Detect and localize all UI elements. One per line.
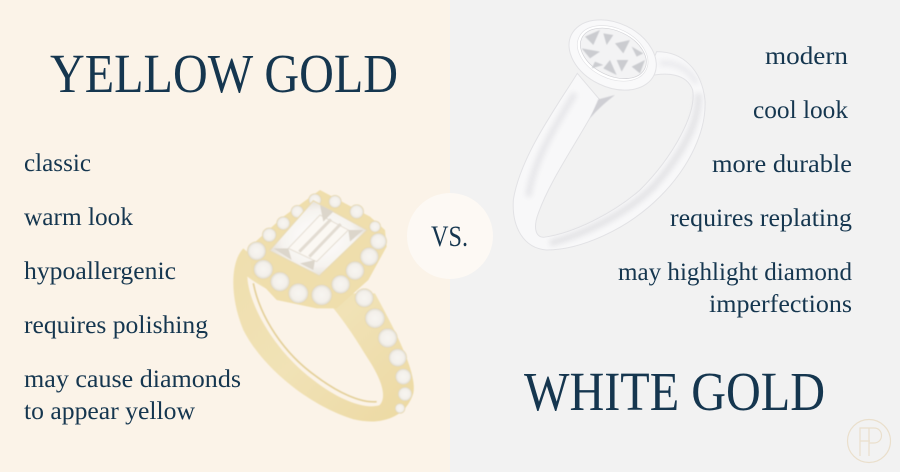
trait: requires replating: requires replating bbox=[670, 205, 853, 232]
trait: classic: classic bbox=[24, 150, 91, 177]
badge: vs. circle bbox=[407, 193, 493, 279]
trait: cool look: cool look bbox=[753, 97, 848, 124]
heading: yellow gold: YELLOW GOLD bbox=[50, 43, 398, 104]
trait: may highlight diamond imperfections bbox=[618, 259, 852, 318]
trait: may highlight diamond imperfections: may highlight diamond bbox=[618, 259, 852, 286]
panel: yellow gold background bbox=[0, 0, 450, 472]
list: white gold traits bbox=[618, 43, 853, 318]
trait: may cause diamonds to appear yellow bbox=[24, 366, 241, 425]
trait: may highlight diamond imperfections: imperfections bbox=[709, 291, 852, 318]
heading: white gold: WHITE GOLD bbox=[524, 361, 825, 422]
icon: white gold bezel ring bbox=[513, 6, 705, 250]
trait: requires polishing: requires polishing bbox=[24, 312, 209, 339]
trait: warm look: warm look bbox=[24, 204, 133, 231]
trait: hypoallergenic: hypoallergenic bbox=[24, 258, 176, 285]
list: yellow gold traits bbox=[24, 150, 241, 425]
trait: modern: modern bbox=[765, 43, 849, 70]
badge: vs. circle: VS. bbox=[431, 220, 468, 253]
icon: yellow gold halo ring bbox=[233, 190, 414, 421]
icon: PP monogram logo bbox=[848, 420, 890, 462]
panel: white gold background bbox=[450, 0, 900, 472]
trait: may cause diamonds to appear yellow: may cause diamonds bbox=[24, 366, 241, 393]
trait: more durable: more durable bbox=[712, 151, 852, 178]
trait: may cause diamonds to appear yellow: to appear yellow bbox=[24, 398, 195, 425]
